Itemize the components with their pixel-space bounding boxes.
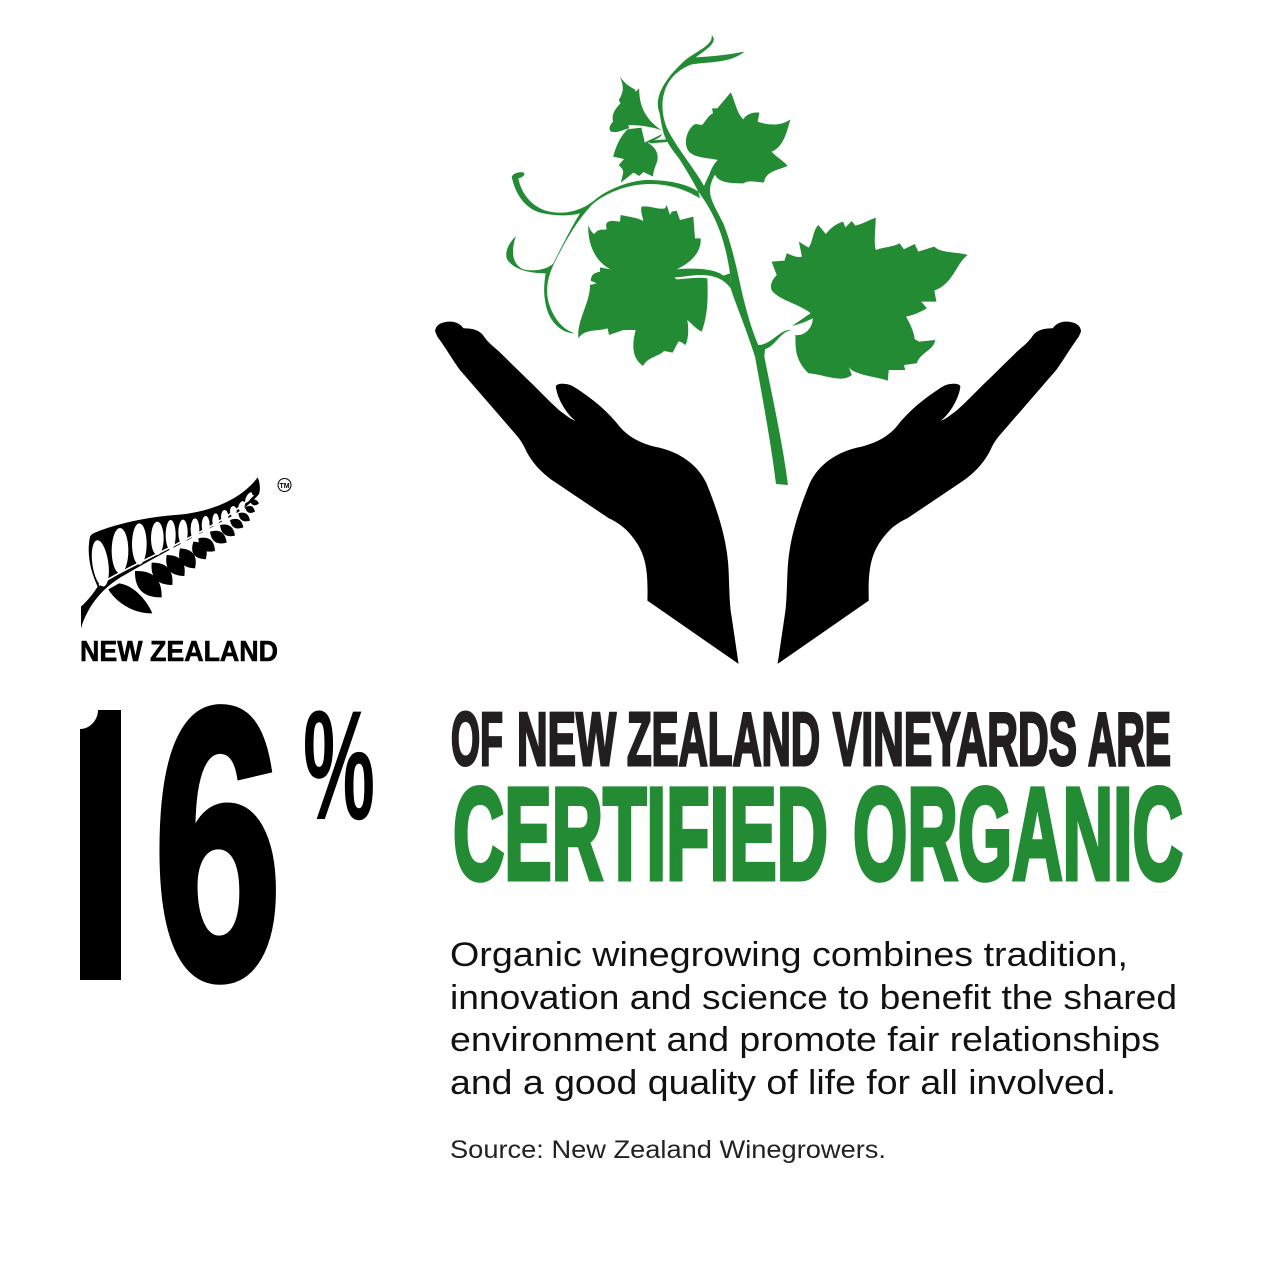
- vine tendrils: [506, 172, 700, 333]
- logo: New Zealand fern mark: [80, 477, 291, 668]
- leaf: small upper: [609, 77, 662, 132]
- icon: grapevine stem and left leaf: [506, 35, 792, 485]
- heading: of New Zealand vineyards are: OF: [451, 697, 503, 781]
- trademark symbol: TM: [279, 483, 290, 490]
- icon: vine leaves: [609, 77, 968, 381]
- illustration: hands holding vine: [435, 35, 1081, 664]
- body paragraph: environment and promote fair relationships: [450, 1021, 1160, 1059]
- trademark symbol: [278, 478, 291, 492]
- percent sign: %: [303, 679, 375, 853]
- icon: silver fern: [81, 477, 260, 628]
- icon: hands: [435, 322, 1081, 664]
- fern white lobes: [89, 491, 254, 588]
- fern lower leaflets: [108, 500, 259, 613]
- big statistic: 16%: [80, 704, 373, 985]
- heading: of New Zealand vineyards are: ARE: [1088, 697, 1171, 781]
- heading: of New Zealand vineyards are: NEW: [517, 697, 616, 781]
- heading: of New Zealand vineyards are: ZEALAND: [627, 697, 820, 781]
- heading: of New Zealand vineyards are: VINEYARDS: [833, 697, 1077, 781]
- fern upper frond: [81, 477, 260, 628]
- source note: Source: New Zealand Winegrowers.: [450, 1136, 886, 1164]
- body paragraph: [450, 936, 1177, 1102]
- digit 6: 6: [153, 630, 282, 1059]
- leaf: top right: [686, 92, 791, 187]
- right hand: [778, 322, 1081, 664]
- vine stem: [658, 35, 792, 485]
- left hand: [435, 322, 739, 664]
- body paragraph: Organic winegrowing combines tradition,: [450, 936, 1128, 974]
- heading: certified organic: CERTIFIED: [453, 760, 828, 907]
- logo wordmark: NEW ZEALAND: [80, 636, 278, 668]
- leaf: small lower: [613, 128, 667, 183]
- heading: of New Zealand vineyards are: [451, 697, 1171, 781]
- fern rib highlight: [99, 495, 253, 585]
- leaf: large left: [578, 205, 731, 366]
- body paragraph: and a good quality of life for all involved.: [450, 1064, 1116, 1102]
- body paragraph: innovation and science to benefit the shared: [450, 979, 1177, 1017]
- leaf: large right: [771, 218, 968, 381]
